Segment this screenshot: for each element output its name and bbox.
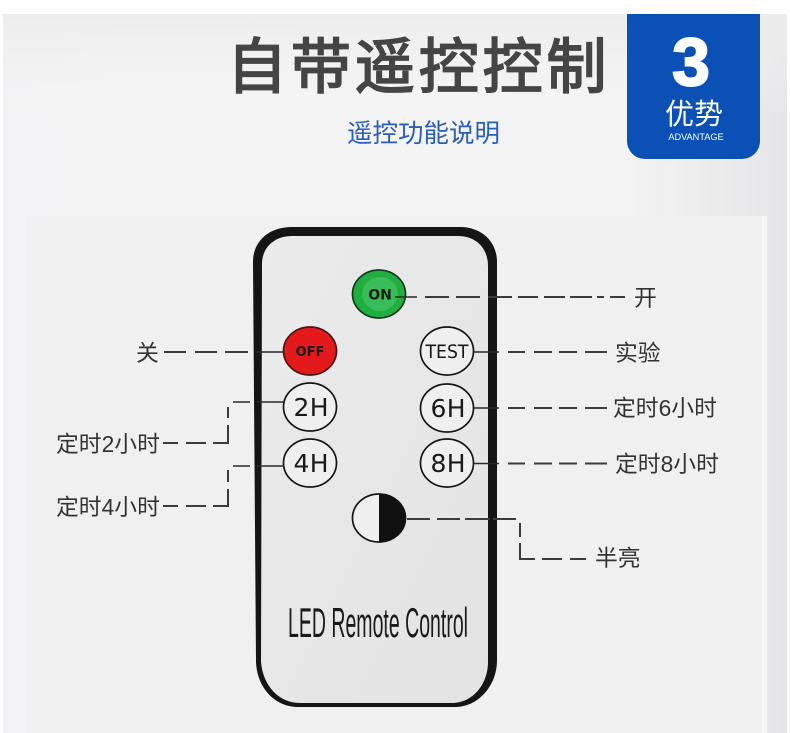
badge english label: ADVANTAGE [668,132,724,142]
label: on: 开 [634,285,657,311]
button: 2H: 2H [294,393,328,422]
button: 4H [284,439,336,487]
callout: half brightness [407,519,641,571]
label: off: 关 [136,340,159,366]
subtitle: 遥控功能说明 [347,120,500,148]
label: 6 hours: 定时6小时 [613,395,717,421]
button: half brightness [352,494,406,542]
button: ON: ON [368,288,392,304]
button: 6H [420,384,474,432]
button: 8H: 8H [430,449,466,478]
button: 4H: 4H [294,449,328,478]
button: TEST: TEST [425,342,469,363]
badge number: 3 [672,24,710,100]
label: test: 实验 [615,340,661,366]
callout: 2 hours [56,402,284,457]
callout: 4 hours [56,466,284,520]
button: OFF: OFF [296,345,324,360]
button: 8H [420,439,474,487]
remote body [253,227,497,707]
badge: 3 advantage [627,14,760,159]
button: ON [352,270,406,318]
remote control [253,227,497,707]
label: 8 hours: 定时8小时 [615,451,719,477]
button: OFF [284,327,336,375]
badge label: 优势 [665,98,723,131]
button: TEST [420,327,474,375]
button: 2H [284,383,336,431]
title: 自带遥控控制 [227,34,610,101]
button: 6H: 6H [430,394,466,423]
label: 2 hours: 定时2小时 [56,431,160,457]
label: half brightness: 半亮 [595,545,641,571]
remote control: LED Remote Control [288,599,468,646]
label: 4 hours: 定时4小时 [56,494,160,520]
